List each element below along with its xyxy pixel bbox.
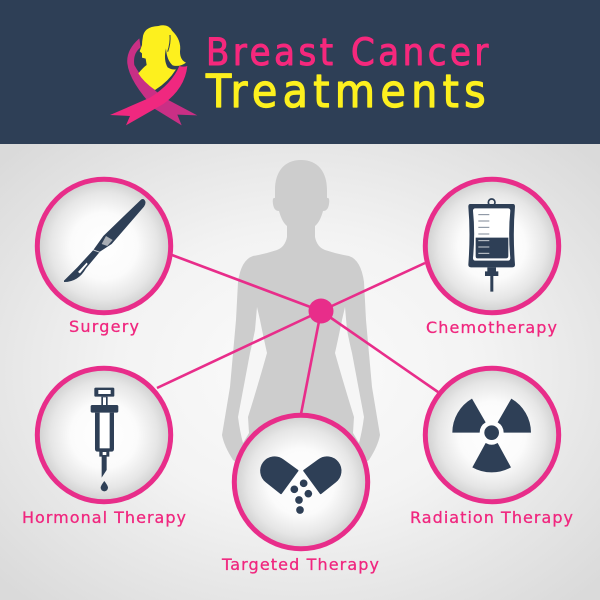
logo: ribbon and woman silhouette bbox=[110, 25, 197, 125]
label: Hormonal Therapy bbox=[22, 508, 186, 527]
icon: IV bag bbox=[468, 199, 515, 292]
panel: surgery bbox=[37, 179, 171, 336]
title bbox=[205, 32, 489, 118]
panel: targeted therapy bbox=[221, 415, 379, 574]
circle bbox=[425, 368, 559, 502]
circle bbox=[234, 415, 368, 549]
panel: chemotherapy bbox=[425, 179, 559, 337]
body silhouette bbox=[222, 160, 380, 470]
header band bbox=[0, 0, 600, 144]
panel: radiation therapy bbox=[410, 368, 573, 527]
connector lines bbox=[157, 255, 438, 414]
background bbox=[0, 144, 600, 600]
circle bbox=[37, 368, 171, 502]
title line: Treatments: Treatments bbox=[205, 66, 486, 118]
label: Surgery bbox=[69, 317, 139, 336]
icon: capsule bbox=[261, 457, 341, 514]
icon: radiation symbol bbox=[452, 399, 531, 472]
label: Radiation Therapy bbox=[410, 508, 573, 527]
circle bbox=[37, 179, 171, 313]
label: Targeted Therapy bbox=[221, 555, 379, 574]
title line: Breast Cancer: Breast Cancer bbox=[206, 32, 489, 74]
circle bbox=[425, 179, 559, 313]
body arm gaps bbox=[238, 307, 364, 443]
central node bbox=[308, 298, 334, 324]
label: Chemotherapy bbox=[426, 318, 557, 337]
icon: syringe bbox=[91, 388, 118, 491]
icon: scalpel bbox=[64, 199, 145, 282]
panel: hormonal therapy bbox=[22, 368, 186, 527]
